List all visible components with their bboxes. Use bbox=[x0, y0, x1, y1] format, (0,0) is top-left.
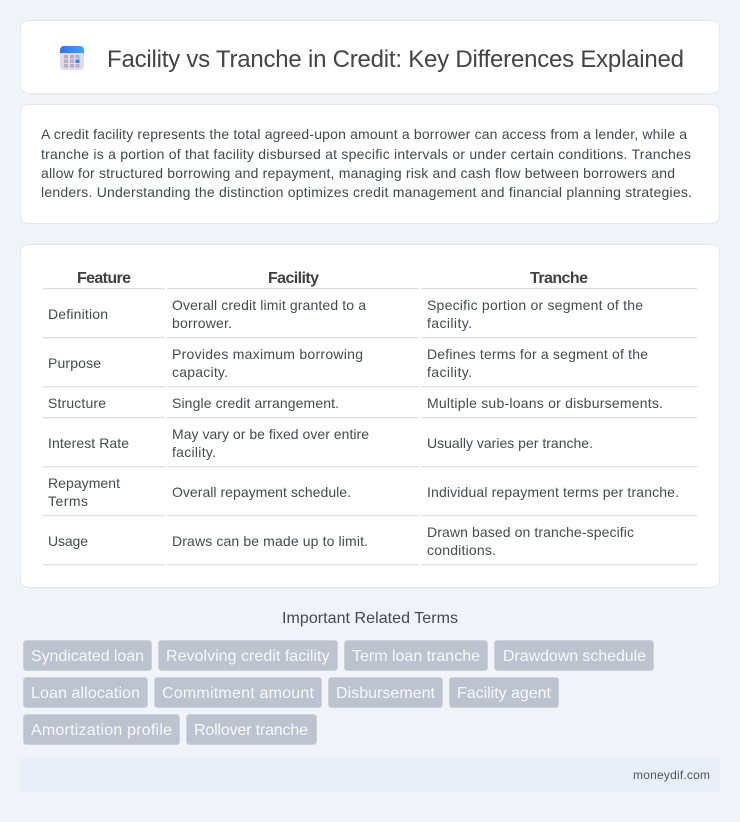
row: definition: Overall credit limit granted to a bbox=[172, 297, 366, 313]
row: interest rate: facility. bbox=[172, 444, 216, 460]
tag: loan allocation bbox=[24, 678, 148, 708]
tag: term loan tranche bbox=[344, 640, 488, 670]
row: definition: facility. bbox=[427, 315, 472, 331]
row: purpose: Defines terms for a segment of the bbox=[427, 346, 648, 362]
row: definition: Specific portion or segment of the bbox=[427, 297, 643, 313]
row: usage: Usage bbox=[48, 533, 88, 549]
intro text bbox=[41, 126, 692, 200]
row: purpose: capacity. bbox=[172, 364, 228, 380]
icon: calendar bbox=[60, 46, 84, 70]
row: repayment terms: Repayment bbox=[48, 475, 120, 491]
table header: Tranche bbox=[530, 270, 588, 287]
row: purpose: Provides maximum borrowing bbox=[172, 346, 363, 362]
tag: syndicated loan: Syndicated loan bbox=[31, 648, 144, 665]
tag: disbursement bbox=[328, 678, 442, 708]
row: repayment terms: Terms bbox=[48, 493, 88, 509]
row: structure: Structure bbox=[48, 395, 106, 411]
row: purpose: facility. bbox=[427, 364, 472, 380]
panel: comparison table bbox=[20, 244, 720, 588]
title: Facility vs Tranche in Credit: Key Differences Explained bbox=[107, 46, 684, 73]
table header: Feature bbox=[77, 270, 131, 287]
row: usage bbox=[48, 524, 634, 558]
footer: moneydif.com bbox=[633, 768, 710, 782]
row: repayment terms bbox=[48, 475, 679, 509]
table header: Facility bbox=[268, 270, 319, 287]
tag: amortization profile: Amortization profile bbox=[31, 722, 172, 739]
tag: syndicated loan bbox=[24, 640, 152, 670]
tag: commitment amount: Commitment amount bbox=[162, 685, 315, 702]
footer bbox=[20, 758, 720, 792]
tag: facility agent bbox=[450, 678, 558, 708]
row: definition: Definition bbox=[48, 306, 108, 322]
row: definition bbox=[48, 297, 643, 331]
row: structure: Single credit arrangement. bbox=[172, 395, 339, 411]
row: usage: conditions. bbox=[427, 542, 496, 558]
tag: term loan tranche: Term loan tranche bbox=[352, 648, 480, 665]
row: usage: Draws can be made up to limit. bbox=[172, 533, 368, 549]
tag: loan allocation: Loan allocation bbox=[31, 685, 140, 702]
intro text: lenders. Understanding the distinction optimizes credit management and financial planning strategies. bbox=[41, 184, 692, 200]
tag: commitment amount bbox=[154, 678, 322, 708]
tag: drawdown schedule: Drawdown schedule bbox=[503, 648, 646, 665]
row: structure bbox=[48, 395, 663, 411]
intro text: tranche is a portion of that facility disbursed at specific intervals or under certain conditions. Tranches bbox=[41, 146, 691, 162]
row: usage: Drawn based on tranche-specific bbox=[427, 524, 634, 540]
related term tags bbox=[24, 640, 654, 744]
row: purpose bbox=[48, 346, 648, 380]
tag: rollover tranche: Rollover tranche bbox=[194, 722, 308, 739]
panel: intro paragraph bbox=[20, 104, 720, 224]
tag: facility agent: Facility agent bbox=[457, 685, 552, 702]
tag: amortization profile bbox=[24, 714, 180, 744]
heading: important related terms: Important Related Terms bbox=[282, 610, 458, 627]
header panel bbox=[20, 20, 720, 94]
row: repayment terms: Overall repayment schedule. bbox=[172, 484, 351, 500]
row: repayment terms: Individual repayment terms per tranche. bbox=[427, 484, 679, 500]
tag: revolving credit facility: Revolving credit facility bbox=[166, 648, 330, 665]
row: interest rate: Usually varies per tranche. bbox=[427, 435, 593, 451]
row: interest rate: May vary or be fixed over entire bbox=[172, 426, 369, 442]
intro text: allow for structured borrowing and repayment, managing risk and cash flow between borrowers and bbox=[41, 165, 675, 181]
row: interest rate bbox=[48, 426, 593, 460]
row: structure: Multiple sub-loans or disbursements. bbox=[427, 395, 663, 411]
tag: disbursement: Disbursement bbox=[336, 685, 436, 702]
table header bbox=[77, 270, 588, 287]
intro text: A credit facility represents the total agreed-upon amount a borrower can access from a lender, while a bbox=[41, 126, 687, 142]
row: definition: borrower. bbox=[172, 315, 232, 331]
tag: drawdown schedule bbox=[494, 640, 654, 670]
row: interest rate: Interest Rate bbox=[48, 435, 129, 451]
tag: revolving credit facility bbox=[158, 640, 338, 670]
tag: rollover tranche bbox=[186, 714, 316, 744]
row: purpose: Purpose bbox=[48, 355, 101, 371]
